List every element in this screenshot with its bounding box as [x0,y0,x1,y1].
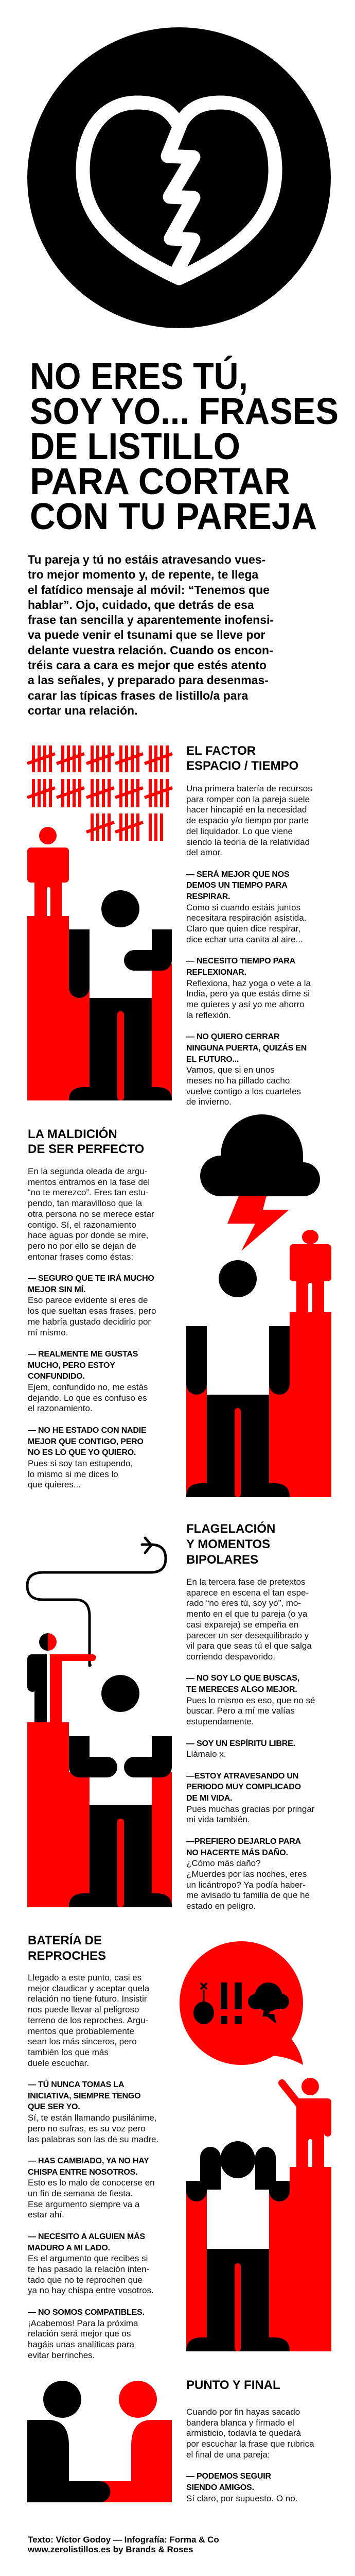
text: maldición: “no te merezco”. Eres tan estu- [28,1188,148,1197]
heading: punto y final: PUNTO Y FINAL [186,2378,280,2392]
text: maldición: entonar frases como éstas: [28,1252,133,1262]
heading: la maldición de ser perfecto [28,1127,144,1156]
text: maldición: En la segunda oleada de argu- [28,1166,148,1176]
text: factor espacio tiempo: REFLEXIONAR. [186,968,246,977]
text: maldición: hace aguas por donde se mire, [28,1230,148,1240]
text: factor espacio tiempo: RESPIRAR. [186,892,230,901]
text: reproches: — NO SOMOS COMPATIBLES. [28,2308,145,2317]
text: maldición [28,1166,156,1489]
figure: section 2 people [186,1230,331,1497]
text: flagelación: casi expareja) se empeña en [186,1620,298,1630]
text: flagelación: —ESTOY ATRAVESANDO UN [186,1772,298,1781]
text: reproches: hagáis unas analíticas para [28,2340,134,2349]
text: reproches: Llegado a este punto, casi es [28,1973,141,1982]
text: flagelación: ¿Muerdes por las noches, eres [186,1869,307,1879]
intro paragraph: Tu pareja y tú no estáis atravesando vues- [28,553,265,566]
text: maldición: mí mismo. [28,1328,68,1337]
text: factor espacio tiempo: Claro que quien dice respirar, [186,924,300,934]
heading: flagelación: BIPOLARES [186,1553,258,1567]
intro paragraph: tro mejor momento y, de repente, te llega [28,568,258,581]
title: SOY YO... FRASES [30,391,339,432]
heading: batería de reproches [28,1933,106,1963]
intro paragraph: delante vuestra relación. Cuando os encon- [28,643,273,657]
text: maldición: NO ES LO QUE YO QUIERO. [28,1448,136,1457]
heading: flagelación: FLAGELACIÓN [186,1522,275,1536]
text: reproches: MADURO A MI LADO. [28,2244,110,2252]
text: flagelación: me avisado tu familia de que he [186,1890,310,1900]
text: maldición: otra persona no se merece estar [28,1209,154,1219]
text: reproches: relación será mejor que os [28,2329,131,2338]
text: punto y final: Cuando por fin hayas sacado [186,2407,300,2417]
text: maldición: MEJOR QUE CONTIGO, PERO [28,1437,144,1446]
title: PARA CORTAR [30,461,290,502]
text: factor espacio tiempo: hacer hincapié en la necesidad [186,805,307,815]
text: flagelación: mento en el que tu pareja (o ya [186,1609,307,1619]
text: maldición: pero no por ello se dejan de [28,1241,136,1251]
text: maldición: — NO HE ESTADO CON NADIE [28,1426,146,1435]
text: reproches: las palabras son las de su madre. [28,2134,158,2144]
text: factor espacio tiempo: siendo la teoría de la relatividad [186,837,310,847]
text: flagelación: TE MERECES ALGO MEJOR. [186,1685,297,1694]
text: factor espacio tiempo: de invierno. [186,1097,232,1107]
text: reproches: ¡Acabemos! Para la próxima [28,2318,138,2328]
intro paragraph: frase tan sencilla y aparentemente inofensi- [28,613,274,626]
intro paragraph: el fatídico mensaje al móvil: “Tenemos que [28,583,270,597]
text: flagelación: —PREFIERO DEJARLO PARA [186,1837,301,1846]
text: factor espacio tiempo: Como si cuando estáis juntos [186,903,300,912]
intro paragraph: va puede venir el tsunami que se lleve por [28,628,265,641]
text: factor espacio tiempo: — NECESITO TIEMPO PARA [186,957,295,965]
text: flagelación: aparece en escena el tan espe- [186,1588,309,1598]
text: reproches: también los que más [28,2047,109,2057]
text: factor espacio tiempo: de espacio y/o tiempo por parte [186,816,309,825]
text: flagelación: rado “no eres tú, soy yo”, mo- [186,1598,301,1608]
text: flagelación: estado en peligro. [186,1901,256,1911]
icon: whip [27,1538,166,1666]
text: maldición: que quieres... [28,1480,81,1489]
text: flagelación: — SOY UN ESPÍRITU LIBRE. [186,1739,295,1748]
text: factor espacio tiempo: me quieres y así yo me ahorro [186,999,305,1009]
heading: batería de reproches: REPROCHES [28,1949,106,1963]
text: punto y final [186,2407,314,2503]
text: factor espacio tiempo: — SERÁ MEJOR QUE NOS [186,870,289,879]
text: reproches: evitar berrinches. [28,2350,95,2360]
text: factor espacio tiempo: EL FUTURO... [186,1055,239,1064]
text: maldición: — SEGURO QUE TE IRÁ MUCHO [28,1274,154,1283]
text: reproches: Esto es lo malo de conocerse en [28,2178,155,2188]
text: factor espacio tiempo: vuelve contigo a los cuarteles [186,1087,301,1096]
figure: section 4 people [186,2078,331,2351]
text: reproches: un fin de semana de fiesta. [28,2189,133,2198]
text: reproches: duele escuchar. [28,2058,89,2068]
text: reproches: Sí, te están llamando pusilánime, [28,2113,156,2123]
heading: la maldición de ser perfecto: DE SER PERFECTO [28,1142,144,1156]
text: punto y final: bandera blanca y firmado el [186,2418,294,2428]
tally marks [27,745,172,841]
text: flagelación: corriendo despavorido. [186,1652,275,1662]
text: flagelación: ¿Cómo más daño? [186,1858,261,1868]
text: flagelación [186,1577,315,1911]
text: maldición: CONFUNDIDO. [28,1372,85,1381]
text: factor espacio tiempo: India, pero ya que estás dime si [186,989,310,998]
text: reproches: INICIATIVA, SIEMPRE TENGO [28,2092,140,2100]
text: reproches: relación no tiene futuro. Insistir [28,1994,147,2004]
text: maldición: pendo, tan maravilloso que la [28,1198,142,1208]
text: punto y final: Sí claro, por supuesto. O no. [186,2494,297,2503]
text: factor espacio tiempo [186,784,312,1107]
title [30,355,339,536]
text: flagelación: En la tercera fase de pretextos [186,1577,306,1587]
text: reproches: QUE SER YO. [28,2103,80,2111]
text: flagelación: vil para que seas tú el que salga [186,1641,312,1651]
figure: section 3 people [27,1633,172,1907]
text: reproches [28,1973,158,2360]
text: flagelación: un licántropo? Ya podía haber- [186,1880,306,1890]
text: maldición: dejando. Lo que es confuso es [28,1393,147,1403]
text: reproches: nos puede llevar al peligroso [28,2005,139,2014]
text: reproches: Es el argumento que recibes si [28,2253,148,2263]
heading: el factor espacio / tiempo: EL FACTOR [186,744,256,758]
text: reproches: pero no sufras, es su voz pero [28,2124,146,2133]
intro paragraph: carar las típicas frases de listillo/a para [28,689,248,702]
text: factor espacio tiempo: dice echar una canita al aire... [186,935,303,944]
text: reproches: — NECESITO A ALGUIEN MÁS [28,2232,145,2241]
text: factor espacio tiempo: para romper con la pareja suele [186,794,310,804]
heading: flagelación: Y MOMENTOS [186,1537,270,1551]
title: NO ERES TÚ, [30,355,248,397]
text: maldición: Pues si soy tan estupendo, [28,1459,133,1468]
text: reproches: terreno de los reproches. Argu- [28,2015,148,2025]
intro paragraph [28,553,274,717]
heading: el factor espacio / tiempo: ESPACIO / TIEMPO [186,759,298,773]
text: factor espacio tiempo: del liquidador. Lo que viene [186,826,293,836]
text: factor espacio tiempo: la reflexión. [186,1010,231,1020]
text: maldición: lo mismo si me dices lo [28,1469,118,1479]
text: maldición: contigo. Sí, el razonamiento [28,1220,136,1230]
footer credits: Texto: Víctor Godoy — Infografía: Forma & Co [28,2535,219,2545]
figure: final pair [27,2381,172,2502]
text: flagelación: DE MI VIDA. [186,1794,232,1803]
text: flagelación: Pues muchas gracias por pringar [186,1804,314,1814]
intro paragraph: a las señales, y preparado para desenmas- [28,673,269,687]
intro paragraph: hablar”. Ojo, cuidado, que detrás de esa [28,598,254,612]
text: maldición: — REALMENTE ME GUSTAS [28,1350,138,1359]
intro paragraph: cortar una relación. [28,704,137,717]
text: flagelación: mi vida también. [186,1815,250,1824]
text: factor espacio tiempo: Vamos, que si en unos [186,1065,275,1075]
text: maldición: los que sueltan esas frases, pero [28,1306,156,1316]
text: punto y final: SIENDO AMIGOS. [186,2483,254,2492]
figure: section 1 people [27,827,172,1100]
heading: flagelación [186,1521,275,1567]
text: reproches: sean los más sinceros, pero [28,2037,137,2046]
text: flagelación: parecer un ser desequilibrado y [186,1631,309,1640]
text: reproches: te has pasado la relación inten- [28,2264,149,2274]
footer credits [28,2535,219,2554]
text: factor espacio tiempo: — NO QUIERO CERRAR [186,1032,279,1041]
text: punto y final: — PODEMOS SEGUIR [186,2472,271,2481]
text: punto y final: por escuchar la frase que rubrica [186,2439,314,2449]
text: maldición: MEJOR SIN MÍ. [28,1285,85,1294]
text: maldición: el razonamiento. [28,1403,93,1413]
heading: batería de reproches: BATERÍA DE [28,1934,102,1947]
text: reproches: — HAS CAMBIADO, YA NO HAY [28,2157,149,2165]
footer credits: www.zerolistillos.es by Brands & Roses [28,2545,193,2554]
text: maldición: Ejem, confundido no, me estás [28,1382,148,1392]
icon: storm cloud [200,1114,320,1251]
text: reproches: ya no hay chispa entre vosotros. [28,2285,154,2295]
text: reproches: CHISPA ENTRE NOSOTROS. [28,2168,137,2177]
text: reproches: mejor claudicar y aceptar quela [28,1984,149,1993]
text: factor espacio tiempo: Reflexiona, haz yoga o vete a la [186,978,311,988]
text: factor espacio tiempo: Una primera batería de recursos [186,784,312,793]
text: flagelación: Pues lo mismo es eso, que no sé [186,1696,315,1705]
text: reproches: mentos que probablemente [28,2026,134,2036]
text: maldición: me habría gustado decidirlo por [28,1317,151,1327]
text: flagelación: buscar. Pero a mí me valías [186,1706,295,1716]
text: flagelación: Llámalo x. [186,1749,226,1759]
text: factor espacio tiempo: NINGUNA PUERTA, QUIZÁS EN [186,1044,307,1053]
text: punto y final: armisticio, todavía te quedará [186,2428,301,2438]
text: factor espacio tiempo: necesitara respiración asistida. [186,913,306,923]
text: factor espacio tiempo: DEMOS UN TIEMPO PARA [186,881,288,890]
text: reproches: tado que no te reprochen que [28,2275,143,2285]
text: flagelación: NO HACERTE MÁS DAÑO. [186,1849,288,1857]
icon: broken heart circle [27,27,331,328]
title: DE LISTILLO [30,426,240,467]
heading: el factor espacio / tiempo [186,744,298,773]
text: reproches: estar ahí. [28,2210,64,2219]
text: flagelación: PERIODO MUY COMPLICADO [186,1783,301,1791]
text: punto y final: el final de una pareja: [186,2450,270,2460]
intro paragraph: tréis cara a cara es mejor que estés atento [28,658,267,672]
text: maldición: Eso parece evidente si eres de [28,1295,148,1305]
icon: speech bubble with symbols [180,1941,303,2065]
text: reproches: Ese argumento siempre va a [28,2199,139,2209]
heading: la maldición de ser perfecto: LA MALDICIÓN [28,1127,117,1141]
text: factor espacio tiempo: del amor. [186,848,222,857]
text: maldición: mentos entramos en la fase del [28,1177,150,1187]
text: flagelación: — NO SOY LO QUE BUSCAS, [186,1674,299,1683]
text: factor espacio tiempo: meses no ha pillado cacho [186,1076,290,1086]
text: maldición: MUCHO, PERO ESTOY [28,1361,115,1370]
text: flagelación: estupendamente. [186,1717,254,1726]
text: reproches: — TÚ NUNCA TOMAS LA [28,2080,124,2089]
